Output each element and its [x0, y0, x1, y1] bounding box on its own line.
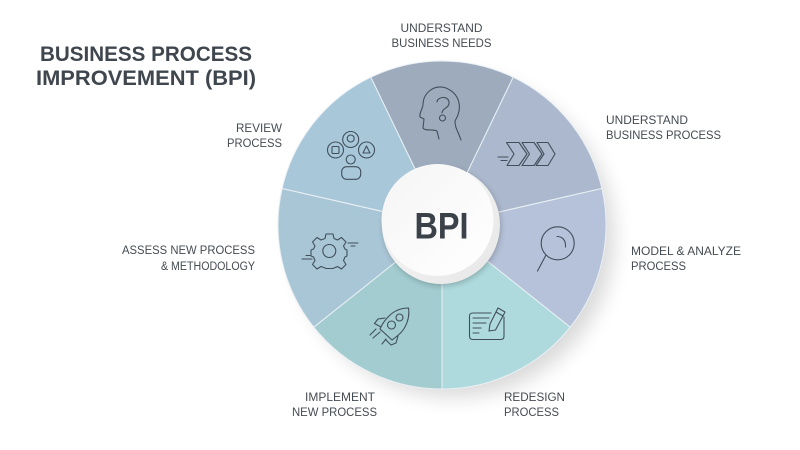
title: IMPROVEMENT (BPI) — [36, 67, 256, 90]
label: understand business needs — [392, 23, 492, 50]
label: understand business needs: UNDERSTAND — [400, 23, 482, 35]
label: understand business process: BUSINESS PROCESS — [606, 130, 721, 142]
icon: document and pencil — [470, 308, 505, 340]
centre disc — [382, 164, 501, 286]
segment: understand business needs — [371, 61, 513, 225]
icon: gear — [302, 234, 358, 269]
segment: assess new process — [278, 188, 442, 327]
icon: person with options — [328, 132, 374, 179]
segment: implement new process — [314, 225, 442, 389]
segment: review process — [282, 77, 442, 225]
icon: head with question mark — [420, 87, 461, 140]
segment: understand business process — [442, 77, 602, 225]
centre label: BPI — [414, 206, 468, 246]
label: implement new process: IMPLEMENT — [305, 392, 375, 404]
label: model and analyze process: PROCESS — [631, 261, 686, 273]
title — [36, 43, 256, 90]
label: review process: PROCESS — [227, 138, 282, 150]
label: redesign process — [504, 392, 565, 419]
label: implement new process: NEW PROCESS — [292, 407, 377, 419]
wheel shadow — [294, 77, 614, 397]
label: review process: REVIEW — [236, 123, 282, 135]
label: assess new process and methodology: & METHODOLOGY — [161, 261, 255, 273]
label: model and analyze process — [631, 246, 741, 273]
label: implement new process — [292, 392, 377, 419]
label: redesign process: REDESIGN — [504, 392, 565, 404]
label: model and analyze process: MODEL & ANALYZE — [631, 246, 741, 258]
label: understand business process — [606, 115, 721, 142]
icon: rocket — [370, 308, 409, 345]
label: redesign process: PROCESS — [504, 407, 559, 419]
segment: model and analyze process — [442, 188, 606, 327]
label: understand business needs: BUSINESS NEEDS — [392, 38, 492, 50]
label: understand business process: UNDERSTAND — [606, 115, 688, 127]
label: assess new process and methodology: ASSESS NEW PROCESS — [122, 245, 255, 257]
segment: redesign process — [442, 225, 570, 389]
label: assess new process and methodology — [122, 245, 255, 273]
wheel — [278, 61, 606, 389]
title: BUSINESS PROCESS — [40, 43, 252, 66]
label: review process — [227, 123, 282, 150]
icon: chevron steps — [498, 142, 555, 166]
icon: magnifying glass — [538, 227, 574, 271]
